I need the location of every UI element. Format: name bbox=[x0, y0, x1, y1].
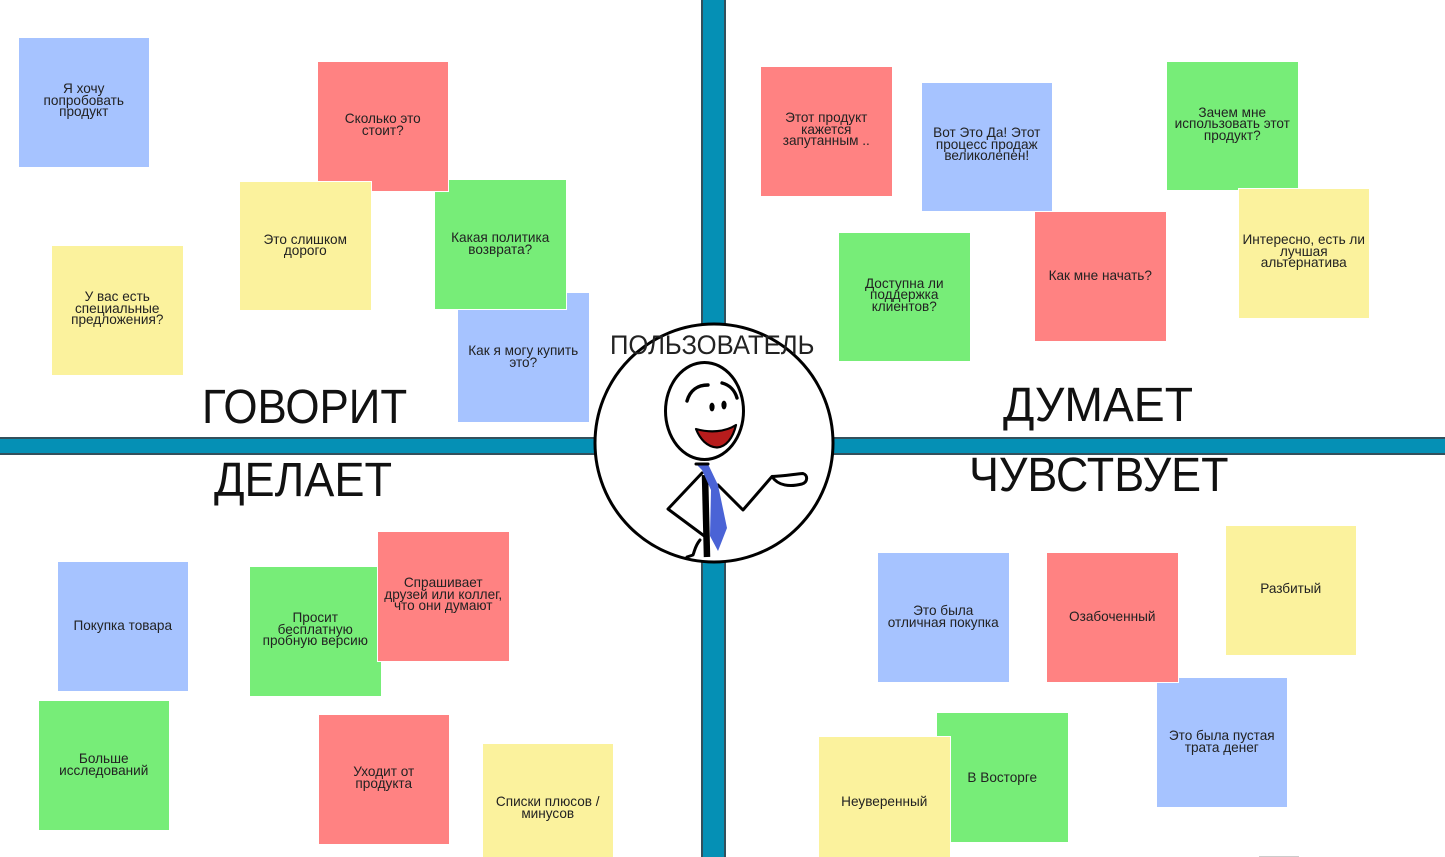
note: great process: Вот Это Да! Этот bbox=[933, 125, 1040, 140]
panel: thinks bbox=[761, 62, 1369, 432]
note: asks friends bbox=[378, 532, 508, 660]
note: buying bbox=[58, 562, 188, 690]
note: pros and cons bbox=[482, 744, 613, 857]
note: asks friends: Спрашивает bbox=[404, 575, 483, 590]
heading: says: ГОВОРИТ bbox=[202, 381, 407, 434]
note: waste of money bbox=[1156, 678, 1287, 806]
note: free trial: пробную версию bbox=[263, 633, 368, 648]
panel: feels bbox=[819, 449, 1356, 857]
note: great process: процесс продаж bbox=[936, 137, 1038, 152]
note: why use: продукт? bbox=[1204, 128, 1261, 143]
note: worried bbox=[1047, 553, 1178, 682]
note: how can I buy: это? bbox=[509, 355, 537, 370]
note: how to start: Как мне начать? bbox=[1049, 268, 1152, 283]
note: how much: Сколько это bbox=[345, 111, 421, 126]
note: how much bbox=[318, 62, 448, 190]
note: more research: Больше bbox=[79, 751, 129, 766]
note: want to try: Я хочу bbox=[63, 81, 104, 96]
note: free trial: бесплатную bbox=[278, 622, 353, 637]
note: delighted: В Восторге bbox=[967, 770, 1037, 785]
note: more research bbox=[38, 701, 169, 830]
note: better alternative: лучшая bbox=[1280, 244, 1328, 259]
note: return policy: Какая политика bbox=[451, 230, 549, 245]
note: want to try: попробовать bbox=[44, 93, 124, 108]
note: great purchase bbox=[878, 553, 1008, 682]
note: support available: клиентов? bbox=[872, 299, 937, 314]
note: why use bbox=[1167, 62, 1298, 190]
note: pros and cons: Списки плюсов / bbox=[496, 794, 600, 809]
note: leaves product: продукта bbox=[355, 776, 412, 791]
note: special offers bbox=[52, 246, 182, 374]
note: waste of money: трата денег bbox=[1185, 740, 1259, 755]
note: special offers: У вас есть bbox=[85, 289, 150, 304]
note: support available: поддержка bbox=[870, 287, 938, 302]
note: return policy bbox=[435, 180, 566, 308]
note: how can I buy bbox=[458, 293, 588, 422]
note: return policy: возврата? bbox=[468, 242, 532, 257]
note: great process bbox=[922, 82, 1052, 211]
note: too expensive: дорого bbox=[284, 243, 327, 258]
note: better alternative bbox=[1238, 189, 1369, 318]
note: better alternative: альтернатива bbox=[1261, 255, 1347, 270]
note: how can I buy: Как я могу купить bbox=[468, 343, 578, 358]
note: asks friends: друзей или коллег, bbox=[384, 587, 502, 602]
note: unsure: Неуверенный bbox=[841, 794, 927, 809]
note: confusing bbox=[761, 67, 892, 196]
note: confusing: запутанным .. bbox=[783, 133, 870, 148]
note: too expensive bbox=[240, 182, 370, 310]
note: waste of money: Это была пустая bbox=[1169, 728, 1275, 743]
panel: says bbox=[19, 38, 589, 434]
note: support available bbox=[839, 232, 970, 361]
horizontal axis bar bbox=[0, 437, 1445, 455]
note: pros and cons: минусов bbox=[521, 806, 574, 821]
note: want to try: продукт bbox=[59, 104, 108, 119]
vertical axis bar bbox=[701, 0, 726, 857]
edge fragment: grey strip bbox=[1259, 856, 1299, 857]
note: better alternative: Интересно, есть ли bbox=[1243, 232, 1365, 247]
note: asks friends: что они думают bbox=[394, 598, 493, 613]
note: confusing: кажется bbox=[801, 122, 851, 137]
note: why use: Зачем мне bbox=[1198, 104, 1266, 120]
heading: feels: ЧУВСТВУЕТ bbox=[969, 449, 1229, 502]
note: leaves product bbox=[318, 715, 449, 844]
note: how much: стоит? bbox=[362, 123, 404, 138]
note: great purchase: Это была bbox=[913, 603, 973, 618]
note: free trial bbox=[250, 567, 380, 696]
note: want to try bbox=[18, 38, 149, 166]
note: great purchase: отличная покупка bbox=[888, 615, 999, 630]
panel: does bbox=[39, 454, 613, 857]
note: free trial: Просит bbox=[292, 610, 338, 625]
note: why use: использовать этот bbox=[1175, 116, 1290, 131]
note: confusing: Этот продукт bbox=[785, 110, 867, 125]
note: more research: исследований bbox=[59, 763, 148, 778]
note: buying: Покупка товара bbox=[73, 618, 172, 633]
note: broken: Разбитый bbox=[1260, 581, 1321, 596]
note: worried: Озабоченный bbox=[1069, 609, 1155, 624]
heading: does: ДЕЛАЕТ bbox=[214, 454, 392, 507]
note: how to start bbox=[1035, 212, 1166, 340]
heading: thinks: ДУМАЕТ bbox=[1003, 379, 1193, 432]
label: user: ПОЛЬЗОВАТЕЛЬ bbox=[610, 330, 814, 360]
note: broken bbox=[1226, 526, 1356, 654]
note: special offers: предложения? bbox=[71, 312, 163, 327]
icon: stick figure bbox=[666, 362, 807, 557]
note: too expensive: Это слишком bbox=[264, 232, 347, 246]
note: special offers: специальные bbox=[75, 301, 160, 316]
center: user circle with figure bbox=[594, 322, 834, 564]
note: support available: Доступна ли bbox=[865, 276, 944, 290]
note: leaves product: Уходит от bbox=[353, 764, 414, 779]
note: delighted bbox=[937, 713, 1068, 842]
note: unsure bbox=[819, 737, 950, 857]
note: great process: великолепен! bbox=[944, 148, 1029, 163]
